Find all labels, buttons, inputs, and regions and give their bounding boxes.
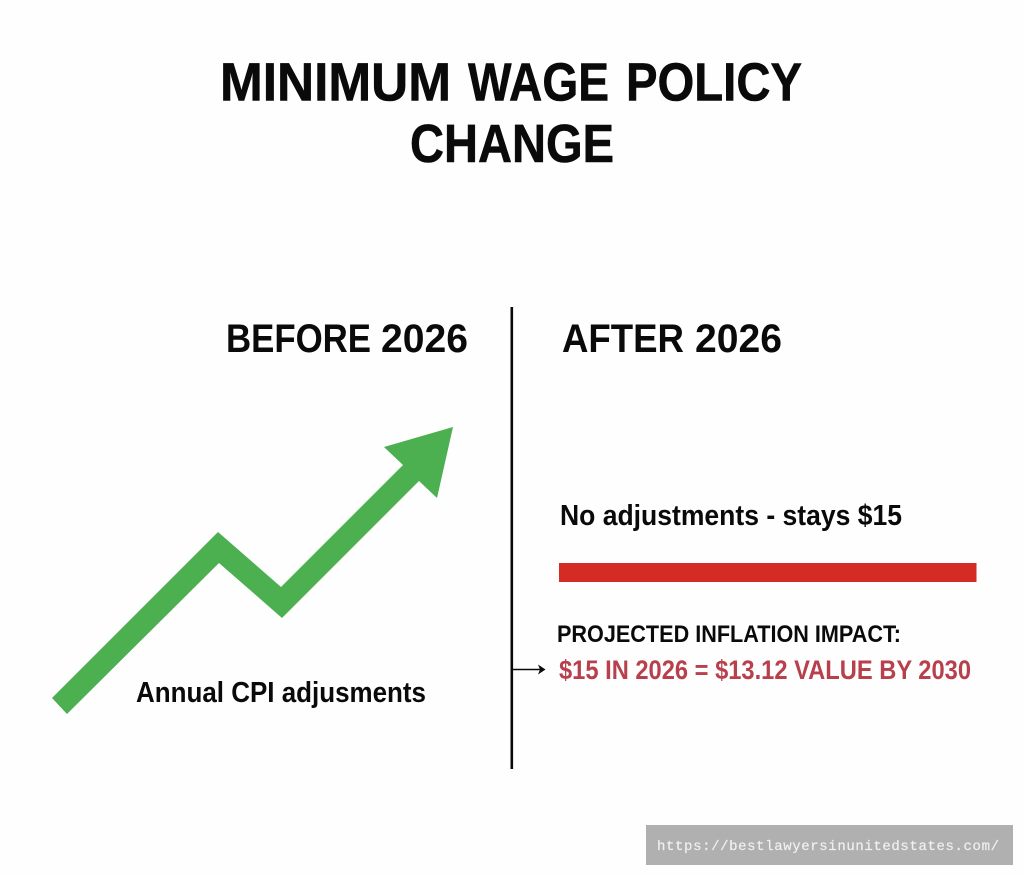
title: POLICY (626, 52, 802, 112)
heading: after 2026: 2026 (695, 317, 782, 361)
heading: after 2026 (562, 317, 782, 361)
title: WAGE (468, 52, 609, 112)
label: annual CPI: Annual CPI adjusments (136, 677, 426, 709)
heading: after 2026: AFTER (562, 317, 684, 361)
title: CHANGE (410, 114, 614, 174)
title: MINIMUM (220, 52, 451, 112)
flat red bar (559, 563, 976, 582)
small arrow (512, 664, 546, 674)
text: no adjustments: No adjustments - stays $15 (560, 500, 902, 532)
watermark: https://bestlawyersinunitedstates.com/ (657, 839, 999, 855)
icon: rising green arrow (52, 427, 453, 714)
heading: before 2026 (226, 317, 468, 361)
text: projected inflation heading: PROJECTED INFLATION IMPACT: (557, 621, 901, 648)
watermark (646, 825, 1013, 865)
heading: before 2026: BEFORE (226, 317, 371, 361)
heading: before 2026: 2026 (381, 317, 468, 361)
center divider (510, 307, 513, 769)
title (220, 52, 802, 174)
text: inflation value: $15 IN 2026 = $13.12 VALUE BY 2030 (559, 655, 971, 685)
